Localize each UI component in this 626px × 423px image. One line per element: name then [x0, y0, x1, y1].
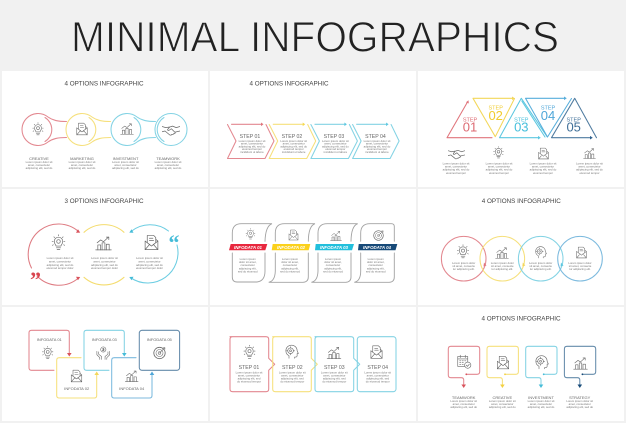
number 04: 04 — [541, 108, 555, 123]
text: option 2: amet, consectetur — [93, 259, 116, 263]
cyan arcs — [129, 225, 178, 283]
text: step 01: amet, consectetur — [241, 142, 263, 146]
text: circle 2: Lorem ipsum dolor — [491, 261, 514, 265]
text: option 4: adipiscing elit, sed do — [576, 168, 603, 172]
box 4 — [564, 346, 596, 388]
text: tab 4: dolor sit amet, — [367, 260, 385, 264]
box 3 — [526, 346, 557, 388]
icon: bulb — [494, 147, 503, 158]
box step 03 — [315, 337, 360, 392]
circle 1 — [441, 236, 486, 281]
text: step 03: amet, consectetur — [324, 142, 347, 146]
triangle 01 — [447, 100, 492, 138]
label: teamwork: adipiscing elit, sed do — [155, 166, 182, 170]
box step 04 — [357, 337, 396, 392]
text: step 02: adipiscing elit, sed — [281, 376, 304, 380]
triangle 03 — [500, 98, 547, 140]
text: step 04: amet, consectetur — [366, 142, 388, 146]
text: option 2: eiusmod tempor — [489, 171, 509, 175]
text: step 01: STEP 01 — [240, 134, 260, 140]
panel: triangle steps — [418, 71, 624, 187]
text: option 1: amet, consectetur — [49, 259, 71, 263]
text: option 2: adipiscing elit, sed do — [486, 168, 513, 172]
text: step 02: amet, consectetur — [283, 142, 305, 146]
text: option 3: eiusmod tempor dolor — [136, 266, 163, 270]
text: tab 2: sed do eiusmod — [280, 269, 300, 273]
label: teamwork: TEAMWORK — [156, 156, 180, 161]
text: creative: CREATIVE — [492, 395, 512, 400]
label: investment: adipiscing elit, sed do — [112, 166, 139, 170]
text: step 03: incididunt ut labore — [324, 150, 348, 154]
ribbon 04 — [358, 244, 397, 250]
quote mark: cyan: “ — [168, 230, 180, 255]
text: investment: Lorem ipsum dolor sit — [528, 399, 555, 403]
text: option 4: eiusmod tempor — [579, 171, 600, 175]
triangle 05 — [552, 98, 596, 140]
ribbon 02: INFODATA 02 — [277, 245, 306, 250]
icon: bulb — [52, 235, 65, 250]
text: tab 2: Lorem ipsum — [282, 257, 299, 261]
label: marketing: adipiscing elit, sed do — [69, 166, 96, 170]
label: marketing: MARKETING — [70, 156, 94, 161]
label 01: INFODATA 01 — [37, 337, 63, 342]
label 04: INFODATA 04 — [119, 386, 145, 391]
icon: calendar — [458, 355, 471, 368]
text: tab 3: adipiscing elit, — [324, 266, 342, 270]
text: option 4: amet, consectetur — [578, 164, 601, 168]
text: step 04: do eiusmod tempor — [366, 380, 390, 384]
step 04 chevron — [353, 122, 399, 158]
text: tab 1: consectetur — [240, 263, 255, 267]
icon: mail — [145, 235, 158, 250]
heading: 4 OPTIONS INFOGRAPHIC — [249, 80, 329, 88]
text: step 01: incididunt ut labore — [240, 150, 264, 154]
text: investment: adipiscing elit, sed do — [528, 405, 555, 409]
tab outline 1 — [232, 224, 272, 282]
icon: handshake — [448, 150, 465, 159]
text: tab 3: consectetur — [326, 263, 340, 267]
ribbon 01: INFODATA 01 — [234, 245, 263, 250]
text: step 01: Lorem ipsum dolor sit — [236, 370, 263, 374]
text: strategy: Lorem ipsum dolor sit — [566, 399, 593, 403]
tab outline 4 — [354, 224, 394, 282]
text: tab 4: Lorem ipsum — [368, 257, 384, 261]
box 05 — [139, 330, 180, 370]
number 05: STEP — [567, 118, 581, 124]
icon: head — [536, 356, 548, 369]
circle 2 — [480, 236, 525, 281]
step 03 chevron — [311, 122, 357, 158]
text: step 01: do eiusmod tempor — [237, 380, 261, 384]
text: tab 1: dolor sit amet, — [239, 260, 257, 264]
text: tab 3: dolor sit amet, — [324, 260, 342, 264]
box 1 — [448, 346, 480, 388]
text: tab 1: adipiscing elit, — [239, 266, 257, 270]
ribbon 03: INFODATA 03 — [320, 245, 349, 250]
text: step 04: STEP 04 — [367, 365, 388, 371]
panel: arrow boxes — [210, 307, 416, 421]
icon: chart — [96, 237, 111, 250]
text: teamwork: amet, consectetur — [453, 402, 475, 406]
label: investment: Lorem ipsum dolor sit — [112, 160, 139, 164]
text: circle 4: tur adipiscing elit. — [569, 267, 591, 271]
text: tab 4: adipiscing elit, — [367, 266, 385, 270]
step: creative ring — [22, 114, 66, 146]
triangle 02 — [473, 96, 515, 137]
label 05: INFODATA 05 — [147, 337, 173, 342]
text: step 02: STEP 02 — [282, 134, 302, 140]
text: tab 2: adipiscing elit, — [281, 266, 299, 270]
icon: mail — [71, 370, 82, 382]
box step 02 — [273, 337, 317, 392]
red arcs — [28, 224, 80, 285]
text: step 04: Lorem ipsum dolor sit — [364, 139, 391, 143]
text: creative: Lorem ipsum dolor sit — [489, 399, 516, 403]
text: option 2: adipiscing elit, sed do — [91, 263, 118, 267]
icon: mail — [497, 356, 509, 369]
text: step 01: amet, consectetur — [238, 374, 260, 378]
text: option 2: Lorem ipsum dolor sit — [486, 161, 513, 165]
panel: staggered boxes — [2, 307, 208, 421]
icon: mail — [289, 230, 298, 240]
number 03: STEP — [514, 118, 529, 124]
box 2 — [487, 346, 518, 388]
text: option 1: Lorem ipsum dolor sit — [47, 256, 74, 260]
text: tab 3: sed do eiusmod — [323, 269, 343, 273]
icon: bulb — [457, 245, 469, 258]
text: step 01: STEP 01 — [239, 365, 259, 371]
text: circle 4: Lorem ipsum dolor — [568, 261, 592, 265]
text: step 02: do eiusmod tempor — [280, 380, 304, 384]
text: investment: INVESTMENT — [528, 395, 554, 400]
text: teamwork: Lorem ipsum dolor sit — [450, 399, 477, 403]
text: step 02: adipiscing elit, sed do — [280, 144, 308, 148]
label: investment: amet, consectetur — [114, 163, 137, 167]
main title: MINIMAL INFOGRAPHICS — [71, 14, 559, 62]
icon: chart — [327, 347, 341, 359]
text: creative: amet, consectetur — [491, 402, 513, 406]
box 01 — [29, 330, 72, 370]
text: step 02: STEP 02 — [282, 365, 303, 371]
icon: chart — [496, 248, 508, 258]
heading: 3 OPTIONS INFOGRAPHIC — [64, 198, 144, 205]
text: step 02: eiusmod tempor — [284, 147, 304, 151]
tab outline 3 — [311, 224, 358, 282]
text: step 03: amet, consectetur — [323, 374, 345, 378]
heading: 4 OPTIONS INFOGRAPHIC — [64, 80, 144, 88]
triangle 04 — [526, 96, 572, 137]
quote mark: red: ” — [30, 267, 41, 292]
text: step 03: eiusmod tempor — [325, 147, 345, 151]
panel: linked circles — [2, 71, 208, 187]
text: step 04: adipiscing elit, sed do — [364, 144, 391, 148]
text: investment: amet, consectetur — [530, 402, 552, 406]
text: option 3: amet, consectetur — [532, 164, 554, 168]
box 04 — [112, 358, 154, 398]
tab outline 2 — [269, 224, 315, 282]
panel: rounded tabs with ribbons — [210, 189, 416, 305]
text: step 04: eiusmod tempor — [367, 147, 387, 151]
text: tab 2: consectetur — [283, 263, 297, 267]
text: tab 3: Lorem ipsum — [325, 257, 342, 261]
text: option 1: adipiscing elit, sed do — [443, 168, 470, 172]
text: circle 3: tur adipiscing elit. — [530, 267, 552, 271]
box 03 — [84, 330, 127, 370]
icon: bulb — [246, 228, 255, 239]
text: tab 4: sed do eiusmod — [366, 269, 386, 273]
number 05: 05 — [566, 120, 581, 134]
icon: bulb — [244, 345, 255, 358]
text: circle 4: sit amet, consecte — [569, 264, 592, 268]
step: teamwork ring — [155, 114, 187, 146]
icon: bulb — [33, 123, 43, 135]
text: step 03: Lorem ipsum dolor sit — [322, 139, 349, 143]
ribbon 02 — [272, 244, 310, 250]
text: creative: adipiscing elit, sed do — [489, 405, 516, 409]
text: circle 3: sit amet, consecte — [529, 264, 552, 268]
icon: head — [286, 345, 298, 358]
box 02 — [57, 358, 99, 398]
icon: chart — [574, 358, 587, 369]
heading: 4 OPTIONS INFOGRAPHIC — [482, 198, 561, 205]
text: option 3: amet, consectetur — [138, 259, 161, 263]
step 01 chevron — [228, 122, 274, 158]
text: option 3: Lorem ipsum dolor sit — [136, 256, 163, 260]
text: option 3: adipiscing elit, sed do — [136, 263, 163, 267]
label 03: INFODATA 03 — [92, 337, 118, 342]
text: option 3: adipiscing elit, sed do — [530, 168, 557, 172]
yellow arcs — [84, 225, 124, 285]
text: option 1: eiusmod tempor — [446, 171, 466, 175]
text: step 04: Lorem ipsum dolor sit — [364, 370, 391, 374]
number 02: STEP — [489, 106, 503, 112]
icon: handshake — [162, 126, 180, 135]
label: marketing: Lorem ipsum dolor sit — [69, 160, 96, 164]
text: option 1: eiusmod tempor dolor — [46, 266, 74, 270]
text: circle 1: tur adipiscing elit. — [453, 267, 475, 271]
text: step 04: STEP 04 — [365, 134, 386, 140]
text: step 03: adipiscing elit, sed — [323, 376, 346, 380]
icon: target — [374, 231, 383, 240]
icon: mail — [539, 148, 548, 159]
text: step 02: amet, consectetur — [281, 374, 303, 378]
label: teamwork: Lorem ipsum dolor sit — [155, 160, 182, 164]
circle 4 — [558, 236, 602, 281]
box step 01 — [230, 337, 275, 392]
text: step 03: do eiusmod tempor — [322, 380, 346, 384]
heading: 4 OPTIONS INFOGRAPHIC — [481, 316, 561, 322]
text: option 1: Lorem ipsum dolor sit — [443, 161, 470, 165]
step: investment ring — [111, 114, 156, 146]
label 02: INFODATA 02 — [64, 386, 90, 391]
ribbon 04: INFODATA 04 — [363, 245, 392, 250]
number 01: STEP — [463, 118, 478, 124]
text: step 03: STEP 03 — [324, 134, 344, 140]
text: step 02: incididunt ut labore — [282, 150, 306, 154]
text: step 01: adipiscing elit, sed do — [239, 144, 266, 148]
text: tab 1: Lorem ipsum — [240, 257, 256, 261]
text: option 3: eiusmod tempor — [533, 171, 553, 175]
text: circle 1: sit amet, consecte — [452, 264, 475, 268]
label: creative: Lorem ipsum dolor sit — [26, 160, 53, 164]
text: step 04: amet, consectetur — [367, 374, 389, 378]
icon: chart — [584, 149, 595, 158]
step: marketing ring — [66, 114, 110, 146]
ribbon 03 — [315, 244, 354, 250]
label: creative: amet, consectetur — [28, 163, 50, 167]
text: teamwork: adipiscing elit, sed do — [450, 405, 478, 409]
icon: mail — [371, 346, 382, 358]
icon: bulb — [42, 346, 53, 359]
step 02 chevron — [269, 122, 316, 158]
text: circle 3: Lorem ipsum dolor — [529, 261, 552, 265]
number 03: 03 — [514, 120, 529, 134]
panel: three arcs — [2, 189, 208, 305]
icon: mail — [577, 247, 586, 258]
number 02: 02 — [488, 108, 503, 123]
icon: chart — [125, 371, 138, 382]
text: step 03: STEP 03 — [324, 365, 345, 371]
text: tab 2: dolor sit amet, — [281, 260, 299, 264]
icon: target — [154, 347, 165, 359]
label: creative: CREATIVE — [29, 156, 49, 161]
text: option 2: eiusmod tempor dolor — [91, 266, 118, 270]
text: option 3: Lorem ipsum dolor sit — [530, 161, 557, 165]
panel: chevron steps — [210, 71, 416, 187]
text: option 1: amet, consectetur — [445, 164, 467, 168]
text: step 01: adipiscing elit, sed — [238, 376, 261, 380]
text: step 04: adipiscing elit, sed — [366, 376, 390, 380]
text: teamwork: TEAMWORK — [452, 395, 476, 400]
icon: head — [536, 247, 546, 258]
icon: chart — [121, 124, 133, 134]
text: circle 2: sit amet, consecte — [491, 264, 514, 268]
text: circle 2: tur adipiscing elit. — [491, 267, 513, 271]
text: option 2: Lorem ipsum dolor sit — [91, 256, 118, 260]
text: step 01: Lorem ipsum dolor sit — [239, 139, 266, 143]
text: strategy: STRATEGY — [569, 395, 591, 400]
icon: chart — [330, 232, 342, 240]
circle 3 — [518, 236, 564, 281]
number 04: STEP — [541, 106, 556, 112]
ribbon 01 — [229, 244, 267, 250]
label: marketing: amet, consectetur — [71, 163, 93, 167]
icon: mail — [77, 123, 87, 135]
label: teamwork: amet, consectetur — [157, 163, 179, 167]
label: creative: adipiscing elit, sed do — [26, 166, 53, 170]
text: strategy: amet, consectetur — [569, 402, 591, 406]
text: strategy: adipiscing elit, sed do — [566, 405, 594, 409]
text: option 1: adipiscing elit, sed do — [47, 263, 74, 267]
text: tab 4: consectetur — [368, 263, 383, 267]
text: step 03: Lorem ipsum dolor sit — [321, 370, 348, 374]
text: step 01: eiusmod tempor — [242, 147, 262, 151]
text: step 03: adipiscing elit, sed do — [322, 144, 349, 148]
text: circle 1: Lorem ipsum dolor — [452, 261, 475, 265]
text: option 2: amet, consectetur — [488, 164, 510, 168]
icon: money — [97, 347, 110, 359]
text: step 02: Lorem ipsum dolor sit — [280, 139, 307, 143]
text: step 04: incididunt ut labore — [365, 150, 389, 154]
label: investment: INVESTMENT — [113, 156, 139, 161]
number 01: 01 — [463, 120, 477, 134]
panel: overlapping circles — [418, 189, 624, 305]
text: step 02: Lorem ipsum dolor sit — [279, 370, 306, 374]
text: option 4: Lorem ipsum dolor sit — [576, 161, 603, 165]
panel: speech boxes with arrows — [418, 307, 624, 421]
text: tab 1: sed do eiusmod — [238, 269, 258, 273]
